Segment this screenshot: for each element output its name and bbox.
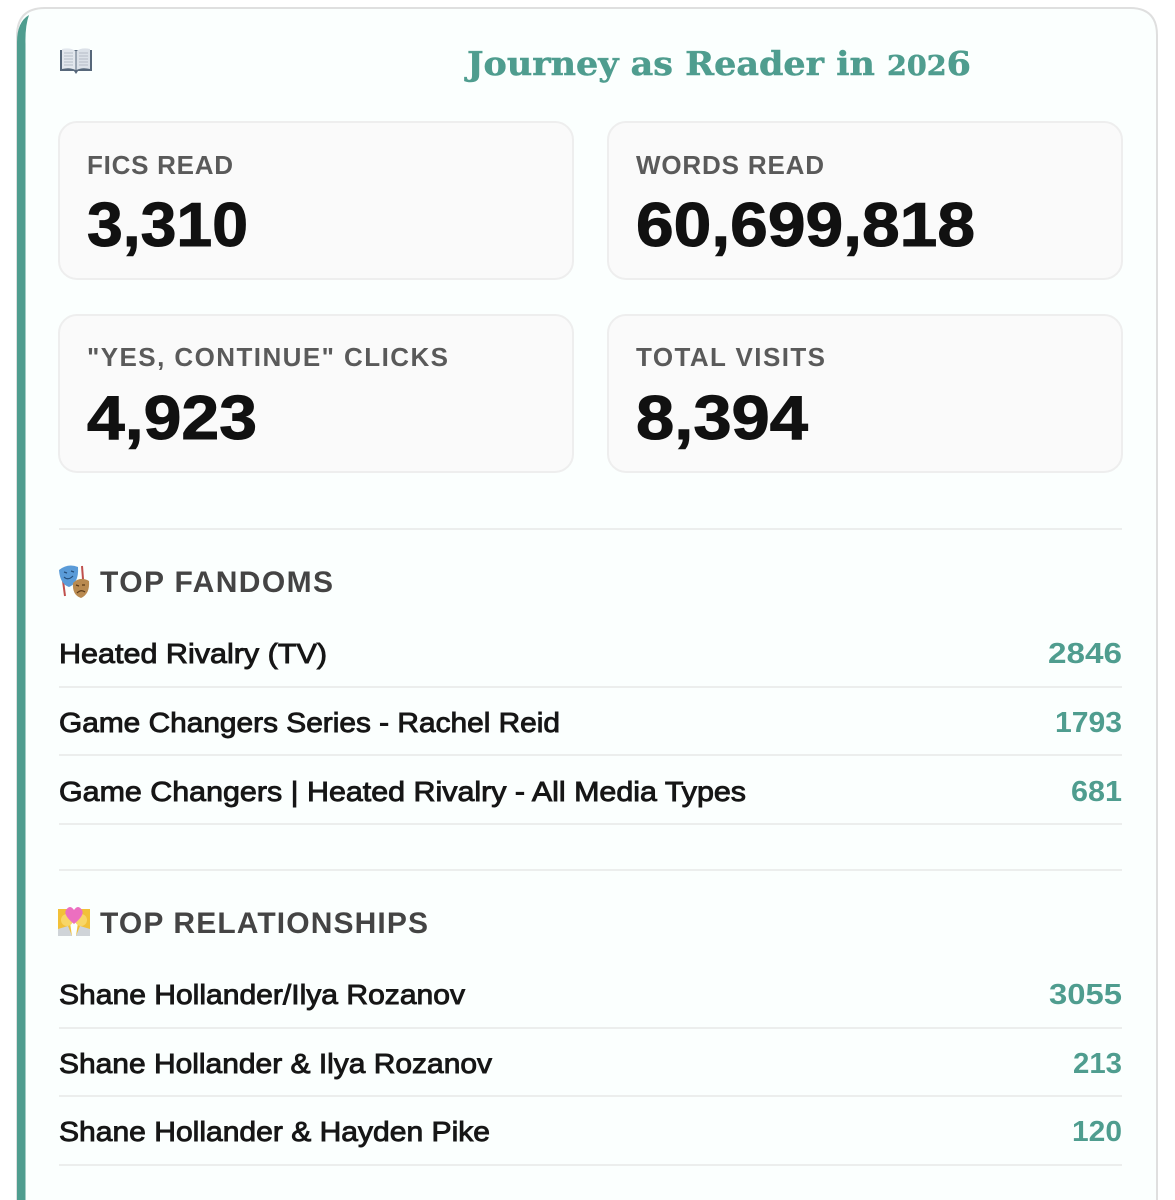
row: Shane Hollander & Ilya Rozanov: Shane Hollander & Ilya Rozanov (59, 1048, 492, 1079)
row: Shane Hollander & Hayden Pike (59, 1116, 1122, 1165)
stat card: yes continue clicks: "YES, CONTINUE" CLICKS (87, 342, 448, 372)
row: Heated Rivalry (TV): Heated Rivalry (TV) (59, 638, 327, 669)
icon: couple with heart (58, 907, 90, 936)
row: Game Changers Series: 1793 (1055, 707, 1122, 739)
row: Shane Hollander/Ilya Rozanov (59, 979, 1122, 1028)
stat card: fics read: 3,310 (87, 191, 248, 260)
section: top fandoms (59, 566, 1122, 824)
row: Game Changers | Heated Rivalry (59, 776, 1122, 824)
stat card: words read: WORDS READ (636, 150, 824, 180)
row: Game Changers | Heated Rivalry: Game Changers | Heated Rivalry - All Media Types (59, 776, 746, 807)
stat card: words read: 60,699,818 (636, 191, 975, 260)
section: top relationships (58, 907, 1122, 1165)
row: Game Changers | Heated Rivalry: 681 (1071, 776, 1122, 808)
row: Shane Hollander/Ilya Rozanov: 3055 (1049, 979, 1122, 1011)
stat card: total visits (608, 315, 1122, 472)
row: Shane Hollander & Hayden Pike: Shane Hollander & Hayden Pike (59, 1116, 490, 1147)
row: Game Changers Series: Game Changers Series - Rachel Reid (59, 707, 560, 738)
icon: open book (60, 48, 92, 74)
row: Game Changers Series (59, 707, 1122, 755)
stat card: total visits: TOTAL VISITS (636, 342, 825, 372)
stat card: total visits: 8,394 (636, 384, 809, 453)
stat card: yes continue clicks (59, 315, 573, 472)
row: Shane Hollander & Ilya Rozanov: 213 (1073, 1048, 1122, 1080)
stat card: fics read: FICS READ (87, 150, 233, 180)
row: Shane Hollander & Hayden Pike: 120 (1072, 1116, 1122, 1148)
row: Heated Rivalry (TV) (59, 638, 1122, 687)
row: Shane Hollander/Ilya Rozanov: Shane Hollander/Ilya Rozanov (59, 979, 465, 1010)
heading: top relationships: TOP RELATIONSHIPS (100, 907, 428, 940)
stat card: yes continue clicks: 4,923 (87, 384, 257, 453)
title: Journey as Reader in 2026 (464, 44, 971, 83)
row: Heated Rivalry (TV): 2846 (1048, 638, 1122, 670)
stat card: words read (608, 122, 1122, 279)
heading: top fandoms: TOP FANDOMS (100, 566, 333, 599)
stat card: fics read (59, 122, 573, 279)
icon: theater masks (59, 566, 89, 598)
row: Shane Hollander & Ilya Rozanov (59, 1048, 1122, 1096)
